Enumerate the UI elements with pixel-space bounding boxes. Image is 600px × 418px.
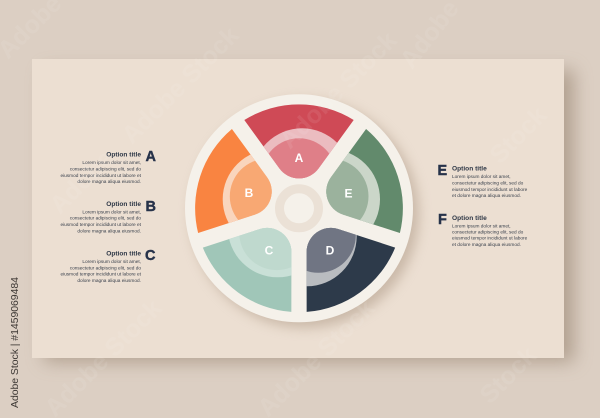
item B text: eiusmod tempor incididunt ut labore et (60, 222, 142, 228)
panel shadow (44, 70, 574, 362)
segment A (244, 104, 354, 178)
left text column (60, 149, 156, 284)
wheel (179, 88, 419, 328)
item C text: eiusmod tempor incididunt ut labore et (60, 272, 142, 278)
wheel letter E: E (344, 186, 353, 200)
segment E (326, 129, 403, 233)
item C text: consectetur adipiscing elit, sed do (70, 265, 141, 271)
watermarks: Stock (474, 341, 542, 409)
wheel letter D: D (326, 244, 335, 258)
item E text: eiusmod tempor incididunt ut labore (452, 187, 528, 193)
item F text: et dolore magna aliqua eiusmod. (452, 242, 521, 248)
item B text: Option title (106, 201, 141, 208)
letter C: C (145, 248, 156, 264)
item B text: dolore magna aliqua eiusmod. (77, 228, 141, 234)
segment B (195, 129, 272, 233)
stock id vertical text: Adobe Stock | #1459069484 (9, 277, 21, 408)
item F text: Option title (452, 215, 487, 222)
item A text (60, 152, 142, 185)
watermarks: Adobe Stock (116, 21, 244, 149)
letter E: E (438, 163, 448, 179)
center ring (280, 189, 318, 228)
item C text (60, 250, 142, 284)
item A text: consectetur adipiscing elit, sed do (70, 167, 141, 173)
item F text (452, 215, 528, 248)
watermarks: Adobe Stock (274, 26, 402, 154)
watermarks: Stock (484, 101, 552, 169)
letter F: F (438, 212, 447, 228)
watermarks: Adobe (44, 144, 119, 219)
wheel letter B: B (245, 186, 254, 200)
wheel letter C: C (265, 244, 274, 258)
item C text: Option title (106, 250, 141, 258)
item A text: Lorem ipsum dolor sit amet, (82, 160, 141, 166)
segment C (202, 228, 292, 312)
item F text: eiusmod tempor incididunt ut labore (452, 236, 528, 242)
wheel disc (185, 94, 413, 322)
item E text: Lorem ipsum dolor sit amet, (452, 174, 511, 180)
item A text: dolore magna aliqua eiusmod. (77, 179, 141, 185)
item F text: consectetur adipiscing elit, sed do (452, 229, 524, 235)
item E text (452, 166, 528, 199)
wheel letter A: A (295, 151, 304, 165)
item F text: Lorem ipsum dolor sit amet, (452, 223, 511, 229)
main panel (32, 59, 564, 358)
letter B: B (146, 199, 156, 215)
item E text: Option title (452, 166, 487, 172)
item E text: consectetur adipiscing elit, sed do (452, 180, 524, 186)
item B text (60, 201, 142, 234)
segment D (306, 228, 396, 312)
wheel shadow (191, 100, 419, 328)
item B text: Lorem ipsum dolor sit amet, (82, 209, 141, 215)
item A text: Option title (106, 152, 141, 158)
item E text: et dolore magna aliqua eiusmod. (452, 193, 521, 199)
item C text: dolore magna aliqua eiusmod. (77, 278, 141, 284)
item A text: eiusmod tempor incididunt ut labore et (60, 173, 142, 179)
letter A: A (146, 149, 156, 165)
item B text: consectetur adipiscing elit, sed do (70, 216, 141, 222)
item C text: Lorem ipsum dolor sit amet, (82, 259, 141, 265)
right text column (438, 163, 528, 248)
